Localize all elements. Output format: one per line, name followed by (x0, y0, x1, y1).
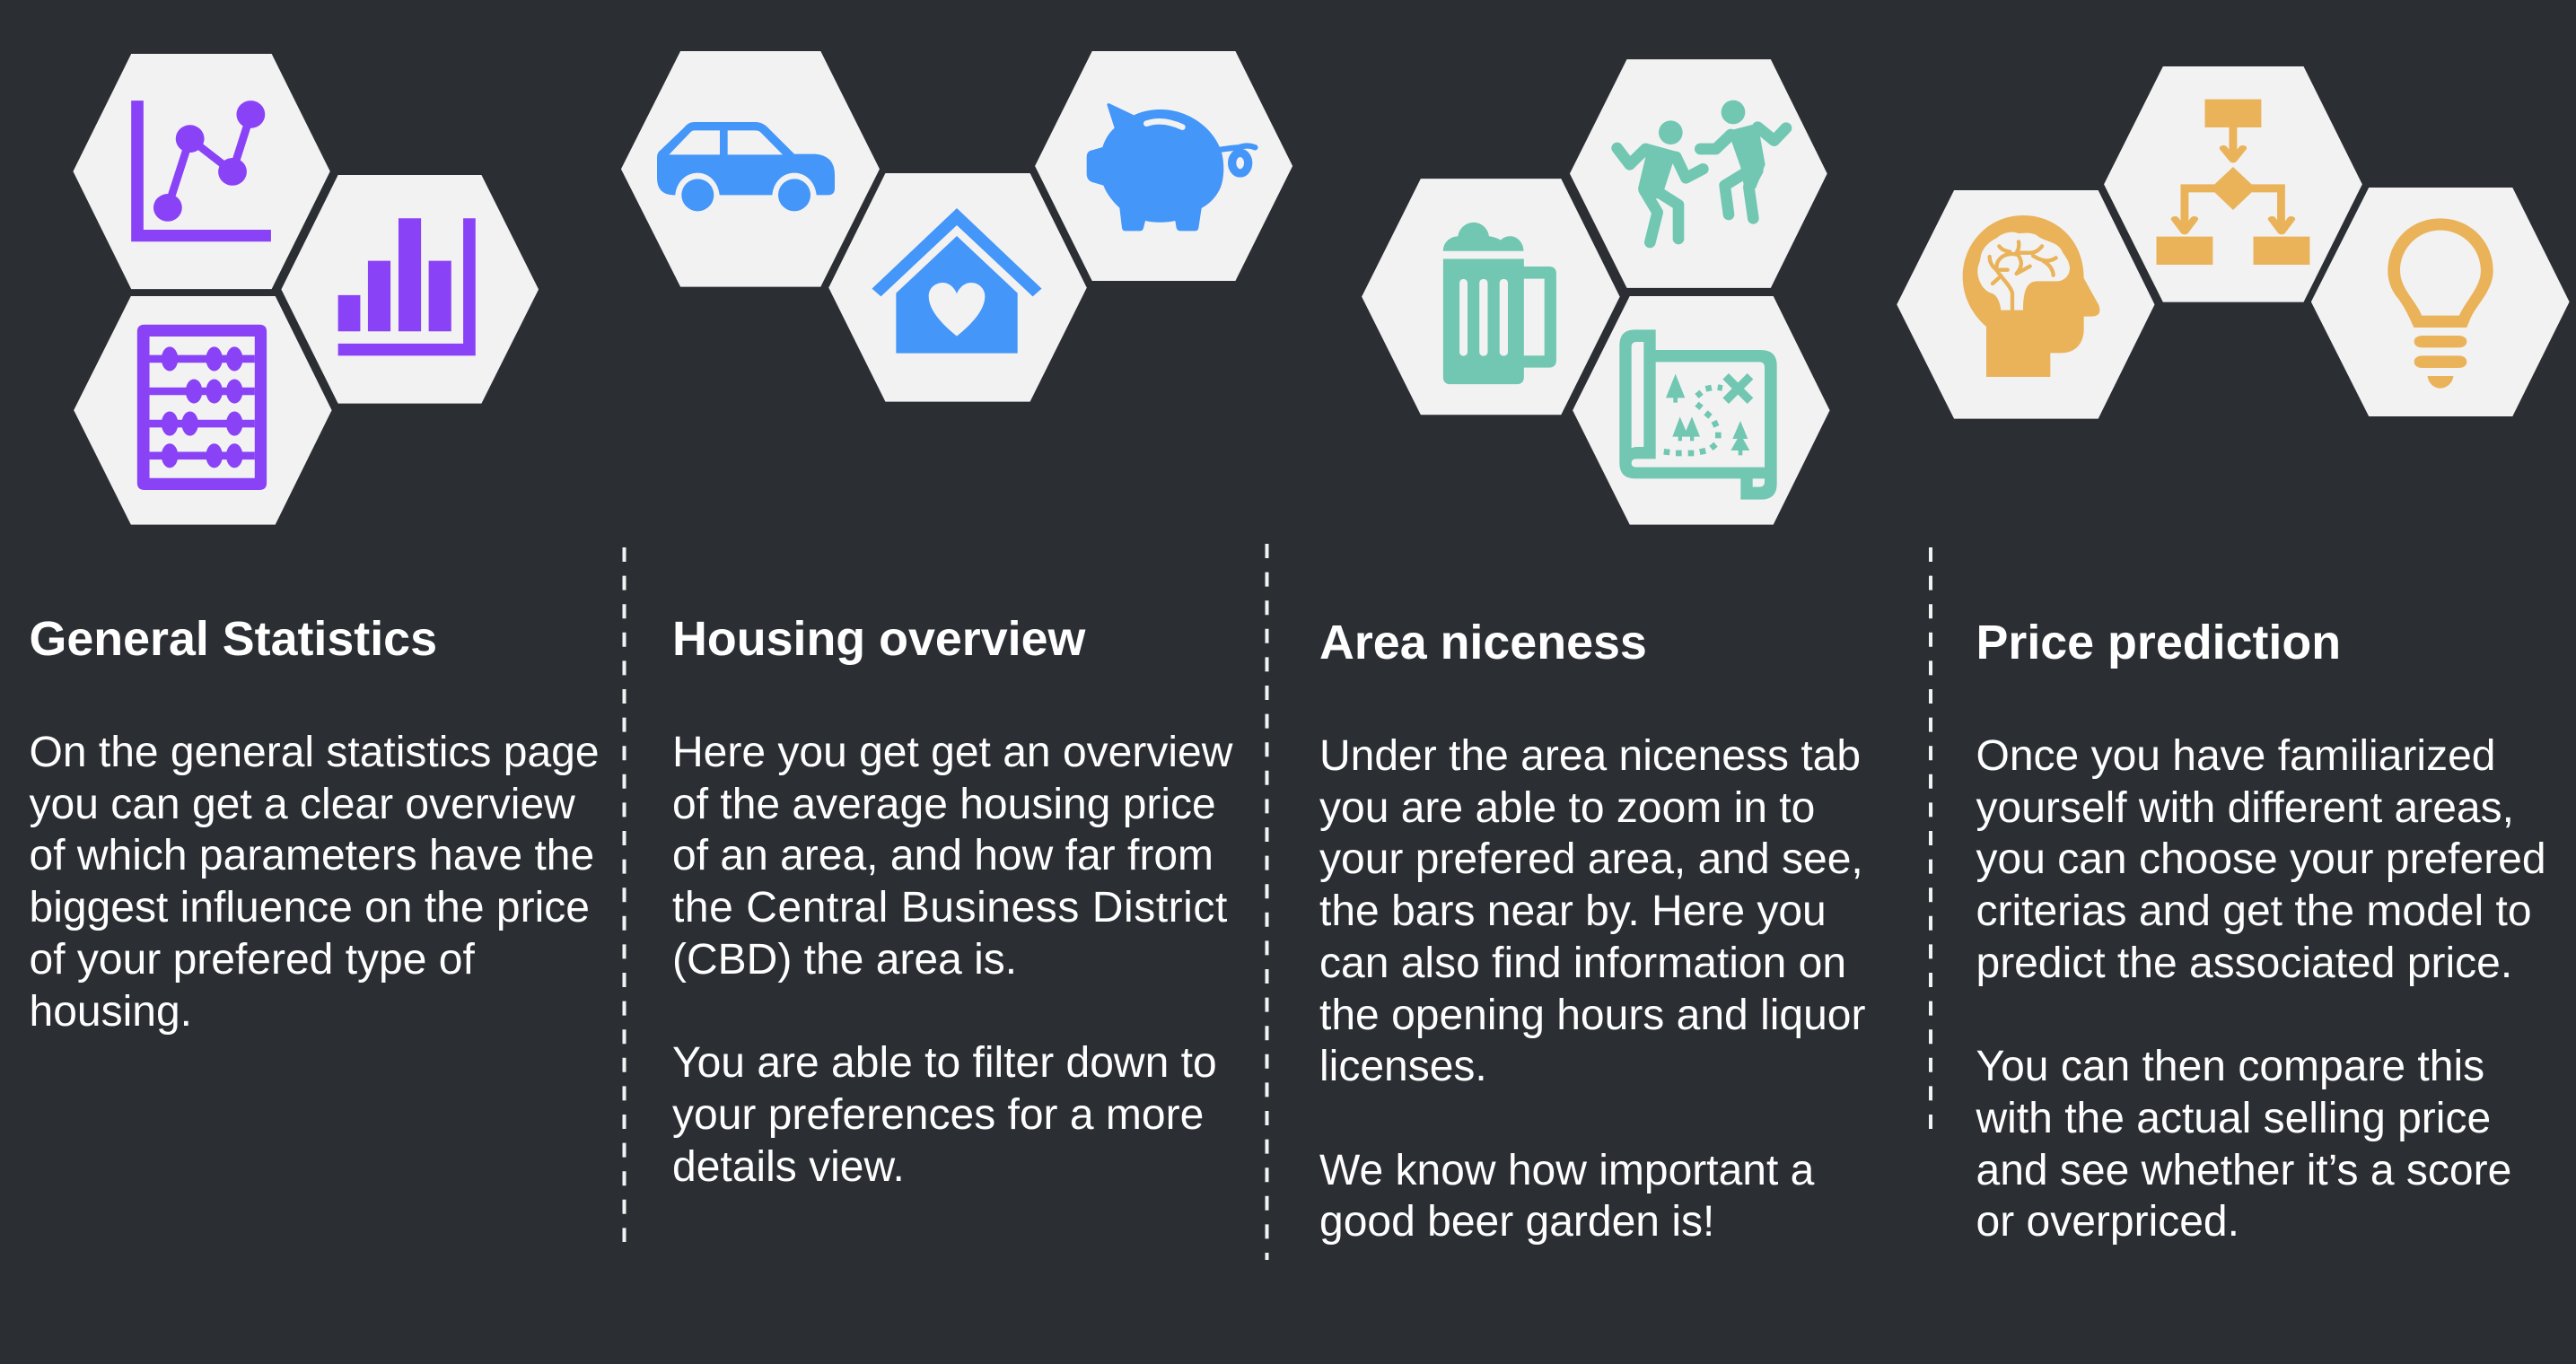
body text: Under the area niceness tab (1319, 732, 1861, 780)
body text: On the general statistics page (29, 729, 600, 776)
body text: Once you have familiarized (1976, 732, 2495, 780)
hexagon: bar chart (281, 175, 539, 404)
body text: You are able to filter down to (672, 1039, 1217, 1087)
body text: you can get a clear overview (29, 781, 575, 828)
body text: criterias and get the model to (1976, 887, 2532, 935)
panel: price prediction hexagons (1897, 66, 2570, 419)
body text: and see whether it’s a score (1976, 1147, 2511, 1194)
hexagon: light bulb (2311, 188, 2570, 416)
body text: biggest influence on the price (29, 884, 590, 931)
body text: the opening hours and liquor (1319, 992, 1865, 1039)
body text: predict the associated price. (1976, 940, 2512, 987)
body text: of your prefered type of (29, 936, 475, 984)
hexagon: line chart (73, 54, 330, 289)
body text: or overpriced. (1976, 1198, 2239, 1246)
hexagon: flowchart (2104, 66, 2362, 302)
body text: details view. (672, 1143, 905, 1191)
body text: of the average housing price (672, 781, 1216, 828)
body text (29, 729, 600, 1036)
body text: good beer garden is! (1319, 1198, 1714, 1246)
body text: yourself with different areas, (1976, 784, 2514, 832)
body text: your preferences for a more (672, 1091, 1204, 1139)
body text: the bars near by. Here you (1319, 887, 1827, 935)
column: area niceness (1319, 616, 1865, 1246)
column: price prediction (1976, 616, 2546, 1246)
body text: the Central Business District (672, 884, 1228, 931)
hexagon: piggy bank (1035, 51, 1292, 281)
heading: Price prediction (1976, 616, 2341, 669)
body text: with the actual selling price (1976, 1095, 2491, 1142)
body text: can also find information on (1319, 940, 1846, 987)
hexagon: car (621, 51, 880, 287)
hexagon: dancers (1570, 59, 1827, 288)
hexagon: abacus (74, 296, 332, 525)
hexagon: house with heart (828, 173, 1087, 402)
hexagon: head with brain (1897, 190, 2155, 419)
body text: Here you get get an overview (672, 729, 1232, 776)
hexagon: beer mug (1362, 179, 1620, 415)
panel: area niceness hexagons (1362, 59, 1830, 525)
body text: your prefered area, and see, (1319, 835, 1863, 883)
body text (672, 729, 1233, 1191)
body text (1976, 732, 2546, 1246)
column: general statistics (29, 612, 600, 1036)
hexagon: treasure map (1573, 296, 1830, 525)
panel: housing overview hexagons (621, 51, 1292, 402)
body text: We know how important a (1319, 1147, 1814, 1194)
heading: Housing overview (672, 612, 1085, 666)
body text (1319, 732, 1865, 1246)
body text: of which parameters have the (29, 832, 594, 879)
column: housing overview (672, 612, 1233, 1191)
heading: General Statistics (29, 612, 437, 666)
body text: you are able to zoom in to (1319, 784, 1815, 832)
body text: licenses. (1319, 1043, 1487, 1090)
heading: Area niceness (1319, 616, 1647, 669)
body text: you can choose your prefered (1976, 835, 2546, 883)
body text: (CBD) the area is. (672, 936, 1017, 984)
body text: You can then compare this (1976, 1043, 2484, 1090)
body text: of an area, and how far from (672, 832, 1214, 879)
body text: housing. (29, 988, 192, 1036)
panel: general statistics hexagons (73, 54, 539, 525)
